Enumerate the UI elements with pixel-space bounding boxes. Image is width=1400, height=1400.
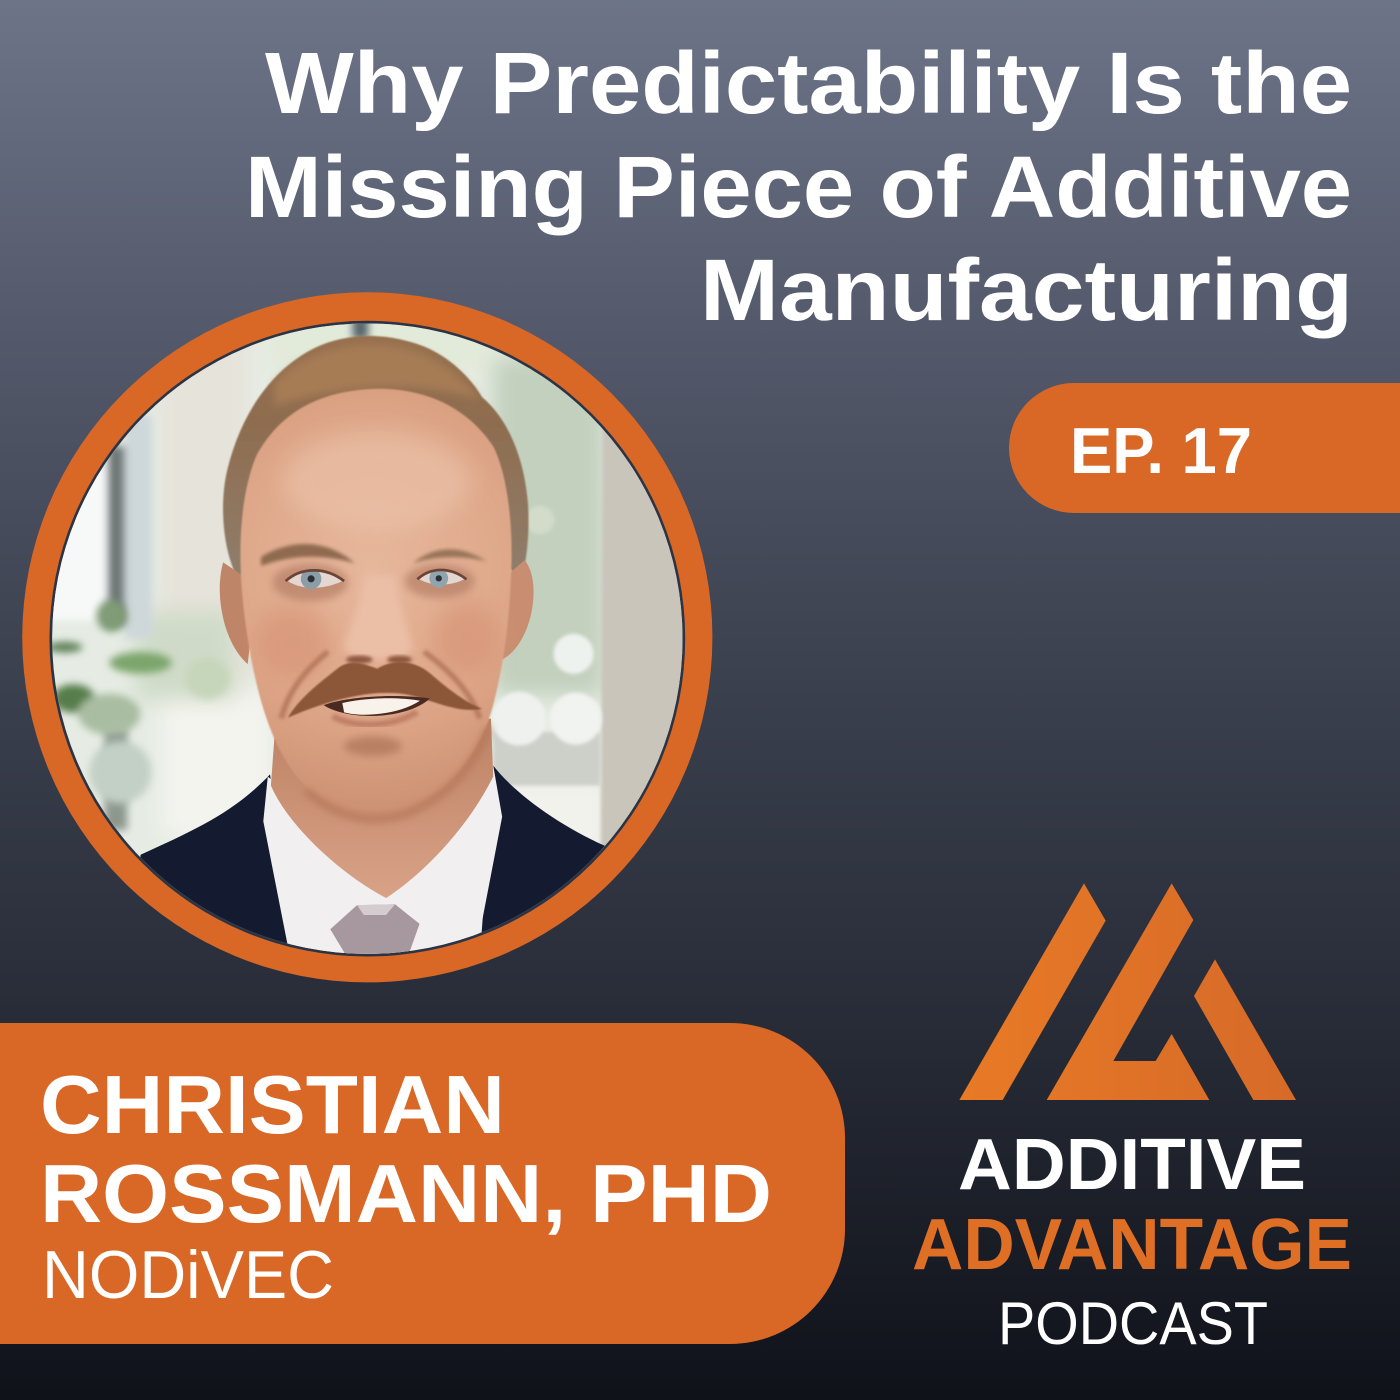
ears <box>220 560 534 664</box>
logo wordmark <box>912 1125 1352 1357</box>
smile creases <box>281 652 480 719</box>
window frame <box>47 317 368 830</box>
guest name panel <box>0 1023 845 1344</box>
episode badge: EP. 17 <box>1070 414 1252 487</box>
plant <box>47 600 230 803</box>
cheeks <box>254 603 500 678</box>
nose <box>344 576 413 664</box>
logo wordmark: ADVANTAGE <box>912 1205 1352 1285</box>
wall <box>599 429 682 849</box>
neck <box>271 719 493 898</box>
podcast logo <box>912 883 1352 1357</box>
portrait photo <box>52 324 682 954</box>
title <box>245 35 1353 339</box>
suit <box>140 766 605 946</box>
title: Why Predictability Is the <box>265 35 1352 132</box>
guest name: ROSSMANN, PHD <box>40 1147 772 1240</box>
bokeh <box>492 506 602 786</box>
moustache <box>288 662 482 718</box>
hair highlight <box>274 345 480 406</box>
guest portrait <box>20 290 716 986</box>
logo wordmark: ADDITIVE <box>958 1125 1306 1205</box>
title: Manufacturing <box>700 242 1353 339</box>
jaw shadow <box>306 728 489 819</box>
hair <box>223 336 529 585</box>
logo mark <box>959 883 1296 1100</box>
guest name: CHRISTIAN <box>40 1058 505 1151</box>
lower lip <box>333 712 417 724</box>
logo wordmark: PODCAST <box>998 1290 1268 1357</box>
smile <box>324 696 430 716</box>
eyes <box>272 564 474 601</box>
portrait ring <box>22 292 712 982</box>
shirt <box>263 765 502 955</box>
forehead light <box>283 433 471 531</box>
soul patch <box>344 736 402 756</box>
face <box>240 389 512 815</box>
title: Missing Piece of Additive <box>245 139 1352 236</box>
eyebrows <box>261 544 355 566</box>
episode badge <box>1009 383 1400 513</box>
tie <box>330 904 420 955</box>
guest company: NODiVEC <box>42 1237 334 1313</box>
guest name <box>40 1058 772 1240</box>
